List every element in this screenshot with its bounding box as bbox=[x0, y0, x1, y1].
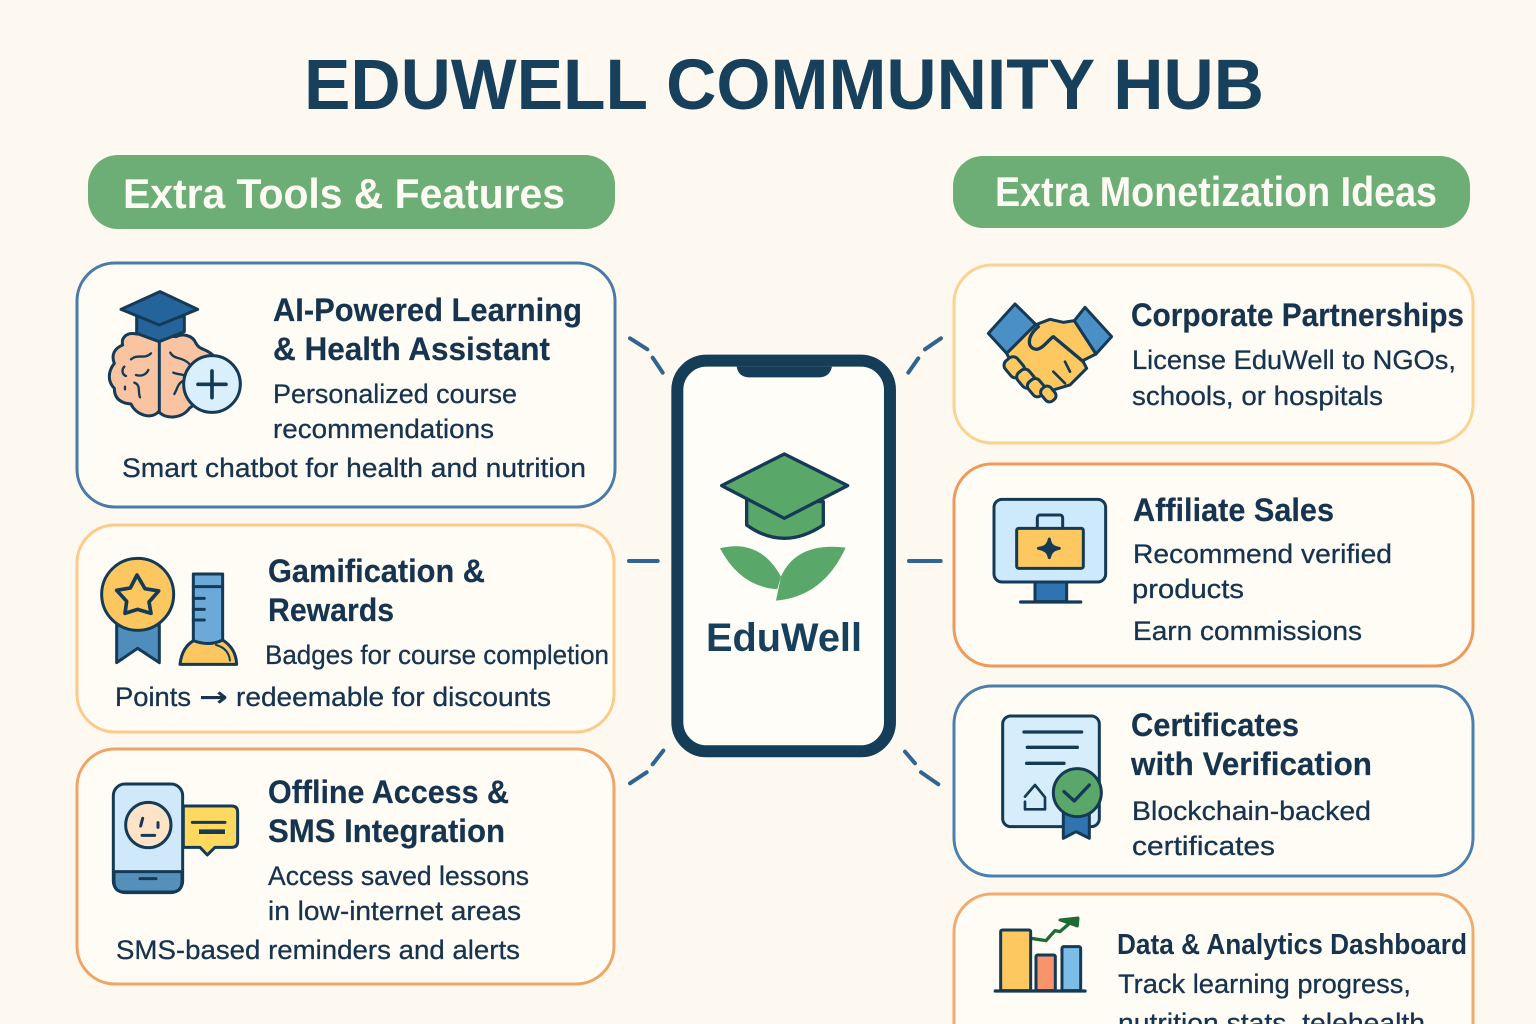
card heading: Certificates bbox=[1131, 707, 1299, 743]
panel: gamification and rewards: Points bbox=[115, 682, 191, 712]
card heading: Offline Access & bbox=[268, 774, 509, 810]
icon: bar chart with rising arrow bbox=[995, 918, 1085, 991]
panel: AI-powered learning and health assistant bbox=[77, 263, 615, 507]
heading: extra tools and features bbox=[88, 155, 615, 229]
panel: affiliate sales: Earn commissions bbox=[1133, 616, 1362, 646]
icon: phone with speech bubble bbox=[113, 784, 238, 893]
panel: affiliate sales: Recommend verified bbox=[1133, 539, 1392, 569]
panel: data and analytics dashboard: Track learning progress, bbox=[1118, 969, 1411, 999]
icon: brain with graduation cap bbox=[109, 292, 240, 417]
card heading: Affiliate Sales bbox=[1133, 492, 1334, 528]
panel: offline access and SMS integration: SMS-based reminders and alerts bbox=[116, 935, 520, 965]
panel: AI-powered learning and health assistant: Smart chatbot for health and nutrition bbox=[122, 453, 586, 483]
icon: certificate with check seal bbox=[1003, 716, 1101, 838]
central phone with EduWell logo bbox=[677, 361, 890, 751]
panel: AI-powered learning and health assistant: & Health Assistant bbox=[273, 331, 550, 367]
panel: gamification and rewards: Rewards bbox=[268, 592, 394, 628]
heading: extra tools and features: Extra Tools & Features bbox=[123, 170, 565, 217]
card heading: Gamification & bbox=[268, 553, 485, 589]
panel: affiliate sales: products bbox=[1132, 574, 1244, 604]
panel: offline access and SMS integration: Access saved lessons bbox=[268, 861, 529, 891]
heading: extra monetization ideas bbox=[953, 156, 1470, 228]
icon: medal and flask bbox=[102, 558, 237, 664]
logo: leaves bbox=[720, 546, 846, 601]
panel: corporate partnerships: License EduWell to NGOs, bbox=[1132, 345, 1456, 375]
panel: corporate partnerships bbox=[954, 265, 1473, 443]
panel: offline access and SMS integration: SMS Integration bbox=[268, 813, 505, 849]
icon: monitor with medical briefcase bbox=[994, 499, 1106, 602]
panel: data and analytics dashboard bbox=[954, 894, 1473, 1024]
panel: certificates with verification: certificates bbox=[1132, 831, 1275, 861]
logo: graduation cap bbox=[722, 454, 848, 538]
panel: gamification and rewards bbox=[77, 525, 614, 732]
panel: certificates with verification: Blockchain-backed bbox=[1132, 796, 1371, 826]
panel: gamification and rewards: Badges for course completion bbox=[265, 640, 609, 670]
title: EDUWELL COMMUNITY HUB bbox=[304, 46, 1264, 125]
heading: extra monetization ideas: Extra Monetization Ideas bbox=[995, 168, 1437, 215]
panel: affiliate sales bbox=[954, 464, 1473, 666]
panel: corporate partnerships: schools, or hospitals bbox=[1132, 381, 1383, 411]
logo wordmark: EduWell bbox=[706, 616, 862, 660]
panel: AI-powered learning and health assistant: Personalized course bbox=[273, 379, 517, 409]
panel: offline access and SMS integration: in low-internet areas bbox=[268, 896, 521, 926]
panel: offline access and SMS integration bbox=[77, 749, 614, 984]
card heading: Data & Analytics Dashboard bbox=[1117, 929, 1467, 961]
card heading: Corporate Partnerships bbox=[1131, 297, 1464, 333]
panel: gamification and rewards: redeemable for discounts bbox=[236, 682, 551, 712]
card heading: AI-Powered Learning bbox=[273, 292, 582, 328]
connector dashes linking the phone to the panels bbox=[629, 338, 941, 784]
panel: certificates with verification: with Verification bbox=[1130, 746, 1372, 782]
panel: gamification and rewards: → bbox=[199, 682, 228, 713]
icon: handshake bbox=[988, 304, 1112, 404]
panel: certificates with verification bbox=[954, 686, 1473, 876]
panel: AI-powered learning and health assistant: recommendations bbox=[273, 414, 494, 444]
